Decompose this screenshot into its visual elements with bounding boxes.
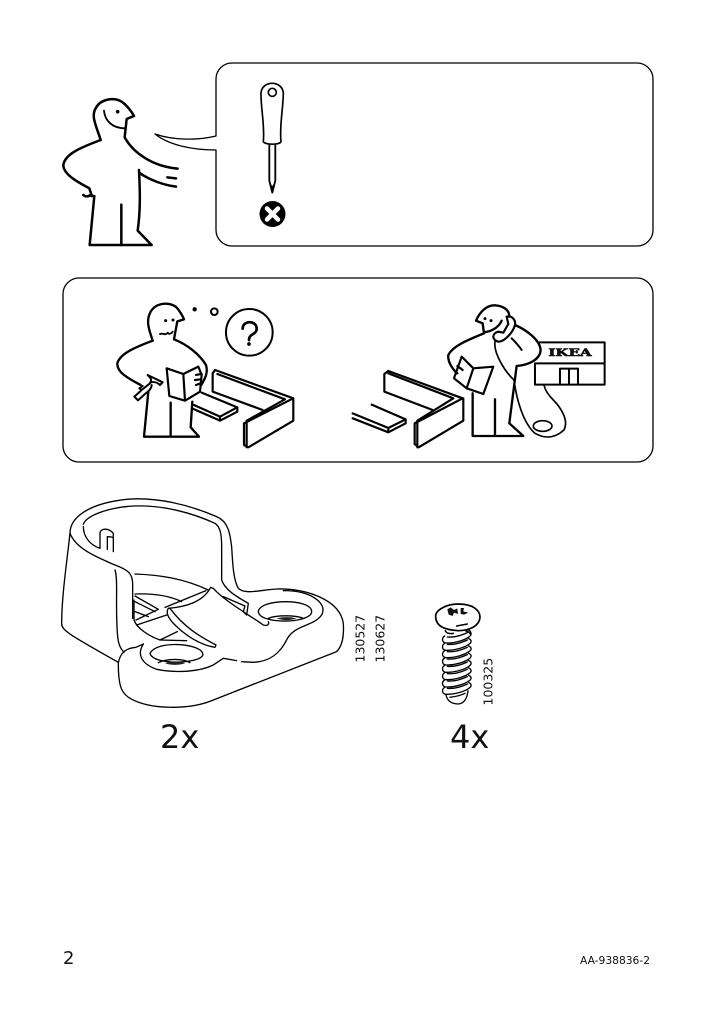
figure: man pointing at bubble [63,99,178,245]
illustration: plastic bracket part [62,499,344,707]
document code: AA-938836-2 [580,954,650,967]
icon: IKEA store: IKEA [548,348,592,359]
furniture pieces: unassembled boards [193,370,293,447]
icon: screwdriver [261,83,283,193]
figure: confused man with hammer and book [117,304,293,447]
center blade detail of bracket [134,574,269,647]
label: quantity 2x: 2x [160,718,199,756]
icon: hammer [134,375,163,400]
icon: open manual [454,357,493,394]
icon: telephone and cord [493,316,566,437]
label: part number 130527: 130527 [352,615,368,662]
label: part number 100325: 100325 [480,658,496,706]
page number: 2 [63,948,74,969]
icon: prohibited cross [260,201,286,227]
panel: speech bubble with screwdriver warning [155,63,653,246]
icon: IKEA store [535,342,605,385]
thought bubbles and question mark [192,307,273,356]
panel: ask for help [63,278,653,462]
furniture pieces: partly assembled boards [353,371,463,447]
figure: man calling IKEA on the phone [353,305,605,447]
label: quantity 4x: 4x [450,718,489,756]
illustration: screw [436,604,480,704]
label: part number 130627: 130627 [372,615,388,662]
icon: open manual [167,367,202,401]
